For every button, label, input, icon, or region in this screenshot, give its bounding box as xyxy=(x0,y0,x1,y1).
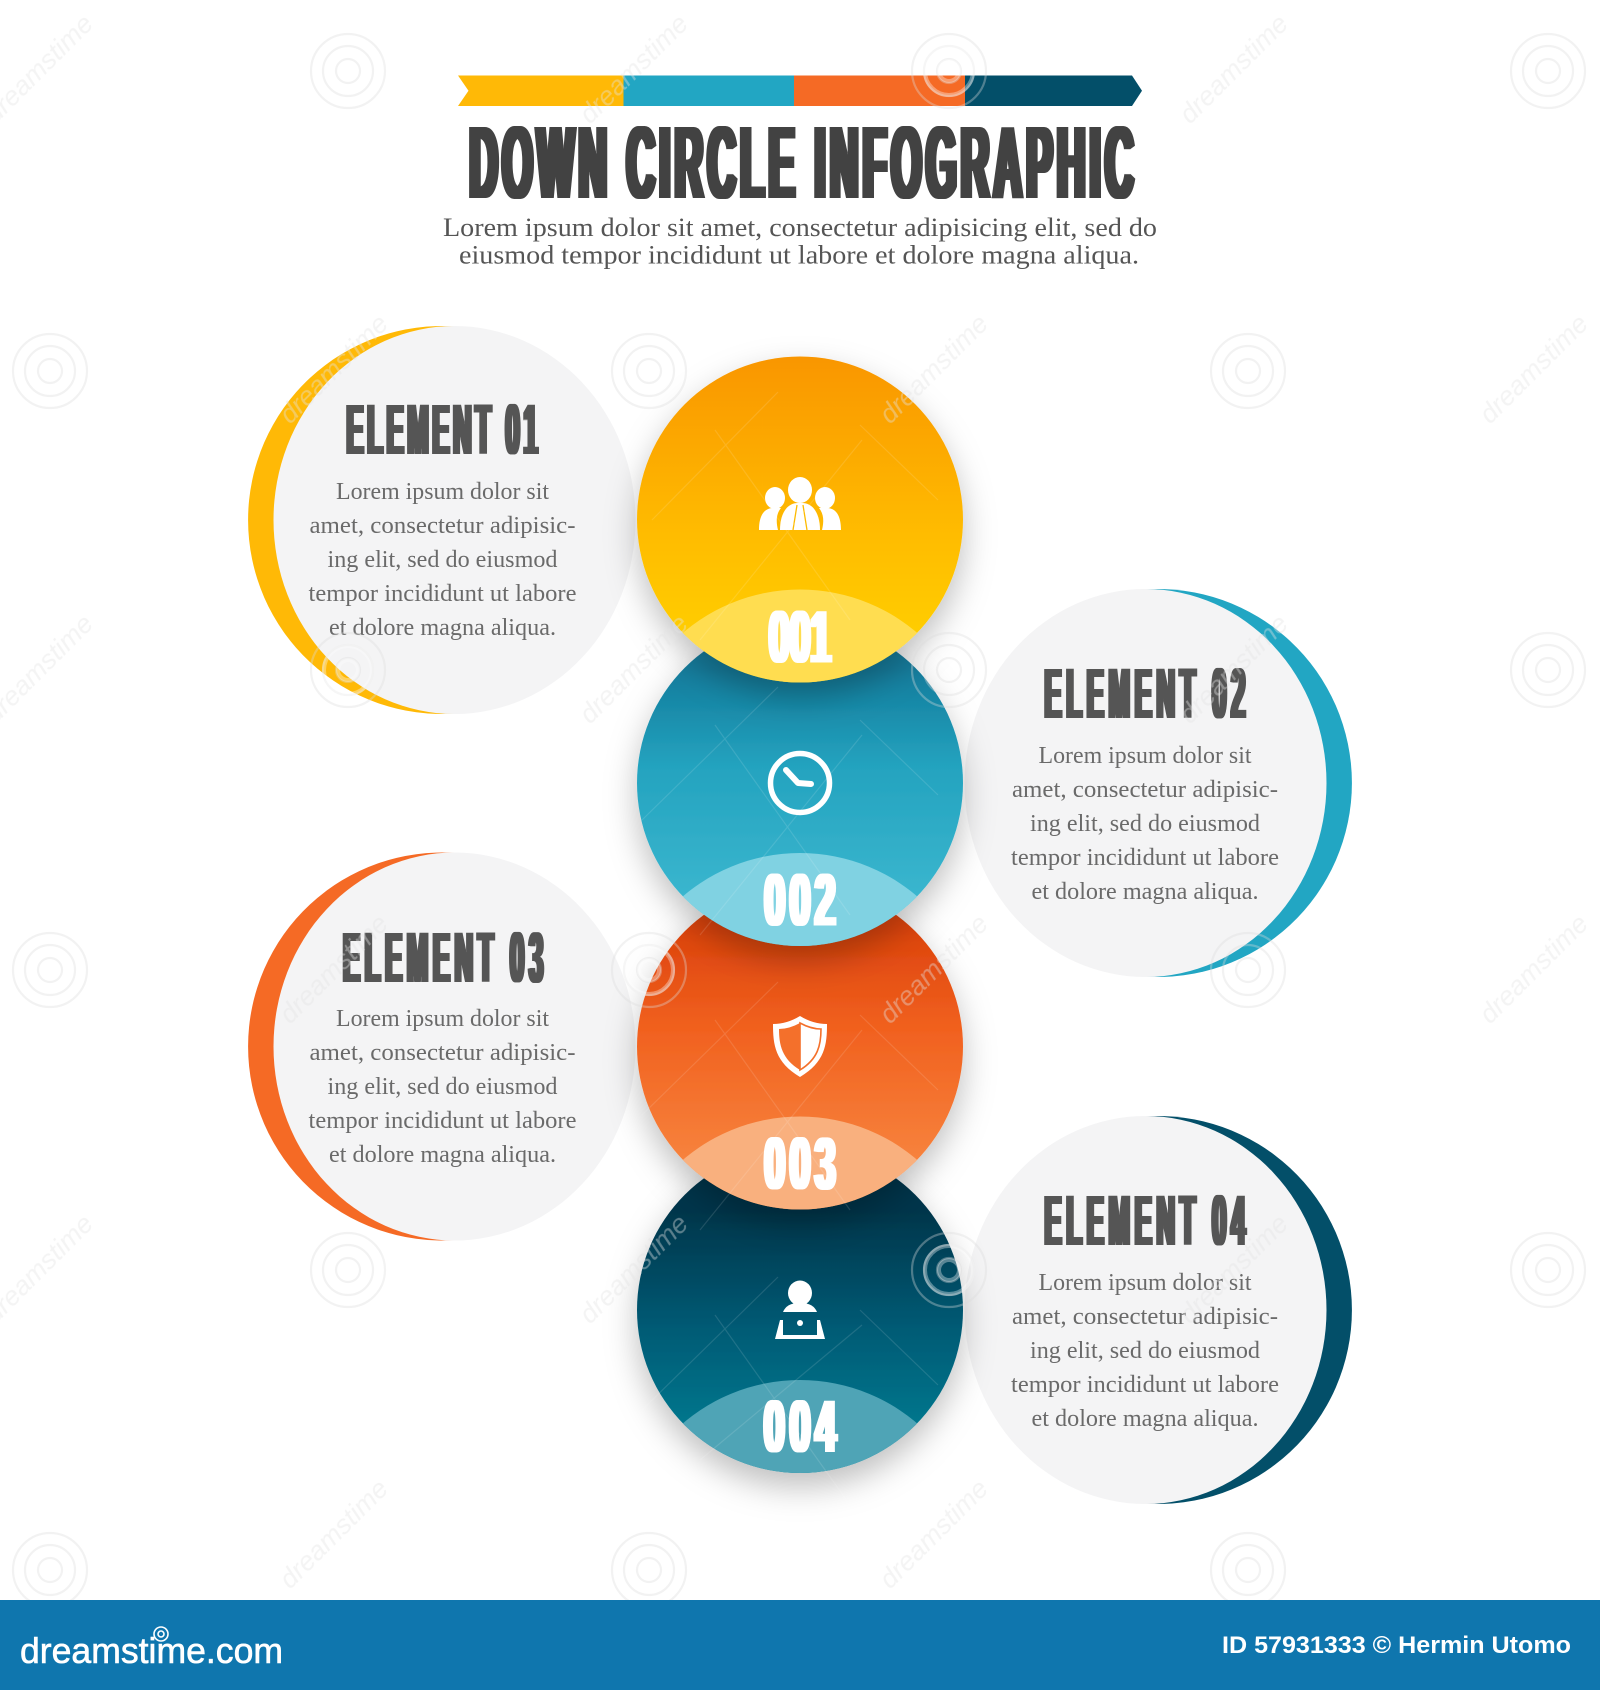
watermark: dreamstime xyxy=(873,308,994,429)
disc 03 xyxy=(274,852,636,1240)
subtitle: eiusmod tempor incididunt ut labore et dolore magna aliqua. xyxy=(459,240,1139,270)
watermark: dreamstime xyxy=(573,8,694,129)
number 004: 004 xyxy=(764,1386,836,1468)
circle 003 xyxy=(620,913,980,1226)
heading 04: ELEMENT 04 xyxy=(1044,1182,1246,1261)
watermark: dreamstime xyxy=(1173,8,1294,129)
circle 004 xyxy=(620,1176,980,1504)
body 01: tempor incididunt ut labore xyxy=(308,581,576,607)
crescent 03 xyxy=(248,853,456,1240)
disc 004 xyxy=(637,1147,963,1473)
watermark: dreamstime xyxy=(1473,908,1594,1029)
icon: person at laptop xyxy=(775,1280,825,1339)
body 02: tempor incididunt ut labore xyxy=(1011,845,1279,871)
heading 03: ELEMENT 03 xyxy=(343,919,543,998)
body 03: ing elit, sed do eiusmod xyxy=(328,1074,558,1100)
watermark: dreamstime xyxy=(573,1208,694,1329)
crescent 02 xyxy=(1144,589,1352,977)
watermark: dreamstime xyxy=(873,1473,994,1594)
body 03 xyxy=(308,1006,576,1168)
body 01: et dolore magna aliqua. xyxy=(329,615,556,641)
lens 002 xyxy=(683,853,917,946)
body 03: amet, consectetur adipisic- xyxy=(310,1040,576,1066)
watermark: dreamstime xyxy=(1173,608,1294,729)
watermark: dreamstime xyxy=(273,308,394,429)
body 02: Lorem ipsum dolor sit xyxy=(1038,743,1252,769)
header ribbon xyxy=(458,76,1142,106)
disc 04 xyxy=(964,1116,1326,1504)
body 04 xyxy=(1011,1270,1279,1432)
subtitle: Lorem ipsum dolor sit amet, consectetur adipisicing elit, sed do xyxy=(443,213,1157,242)
watermark: dreamstime xyxy=(1173,1208,1294,1329)
watermark: dreamstime xyxy=(573,608,694,729)
body 02: ing elit, sed do eiusmod xyxy=(1030,811,1260,837)
heading 01: ELEMENT 01 xyxy=(346,391,538,470)
disc 001 xyxy=(637,356,963,682)
icon: clock xyxy=(770,754,830,812)
disc 003 xyxy=(637,884,963,1210)
watermark: dreamstime xyxy=(1473,308,1594,429)
footer logo: dreamstime.com xyxy=(20,1630,283,1671)
subtitle xyxy=(443,213,1157,270)
number 003: 003 xyxy=(764,1123,836,1205)
body 02: et dolore magna aliqua. xyxy=(1032,879,1258,905)
disc 002 xyxy=(637,620,963,946)
body 04: et dolore magna aliqua. xyxy=(1032,1406,1258,1432)
icon: people xyxy=(759,477,841,530)
panel: element 01 xyxy=(248,326,636,714)
number 001: 001 xyxy=(769,597,831,679)
body 01 xyxy=(308,479,576,641)
heading 02: ELEMENT 02 xyxy=(1044,655,1245,734)
disc 01 xyxy=(274,326,636,714)
number 002: 002 xyxy=(764,860,836,942)
title: DOWN CIRCLE INFOGRAPHIC xyxy=(470,104,1133,220)
watermark: dreamstime xyxy=(873,908,994,1029)
body 01: amet, consectetur adipisic- xyxy=(310,513,576,539)
body 02 xyxy=(1011,743,1279,905)
icon: logo spiral xyxy=(154,1627,168,1641)
body 04: ing elit, sed do eiusmod xyxy=(1030,1338,1260,1364)
body 04: tempor incididunt ut labore xyxy=(1011,1372,1279,1398)
body 04: Lorem ipsum dolor sit xyxy=(1038,1270,1252,1296)
lens 004 xyxy=(683,1380,917,1473)
body 01: Lorem ipsum dolor sit xyxy=(336,479,549,505)
icon: shield xyxy=(773,1016,827,1077)
lens 001 xyxy=(683,590,917,682)
panel: element 02 xyxy=(964,589,1352,977)
lens 003 xyxy=(683,1116,917,1210)
watermark: dreamstime xyxy=(273,908,394,1029)
disc 02 xyxy=(964,589,1326,977)
panel: element 03 xyxy=(248,852,636,1240)
image id credit: ID 57931333 © Hermin Utomo xyxy=(1222,1632,1571,1659)
crescent 04 xyxy=(1144,1116,1352,1504)
body 01: ing elit, sed do eiusmod xyxy=(328,547,558,573)
panel: element 04 xyxy=(964,1116,1352,1504)
body 02: amet, consectetur adipisic- xyxy=(1012,777,1278,803)
body 04: amet, consectetur adipisic- xyxy=(1012,1304,1278,1330)
circle 001 xyxy=(620,354,980,710)
body 03: tempor incididunt ut labore xyxy=(308,1108,576,1134)
body 03: Lorem ipsum dolor sit xyxy=(336,1006,549,1032)
watermark: dreamstime xyxy=(273,1473,394,1594)
body 03: et dolore magna aliqua. xyxy=(329,1142,556,1168)
crescent 01 xyxy=(248,326,456,714)
circle 002 xyxy=(620,650,980,976)
footer bar xyxy=(0,1600,1600,1690)
